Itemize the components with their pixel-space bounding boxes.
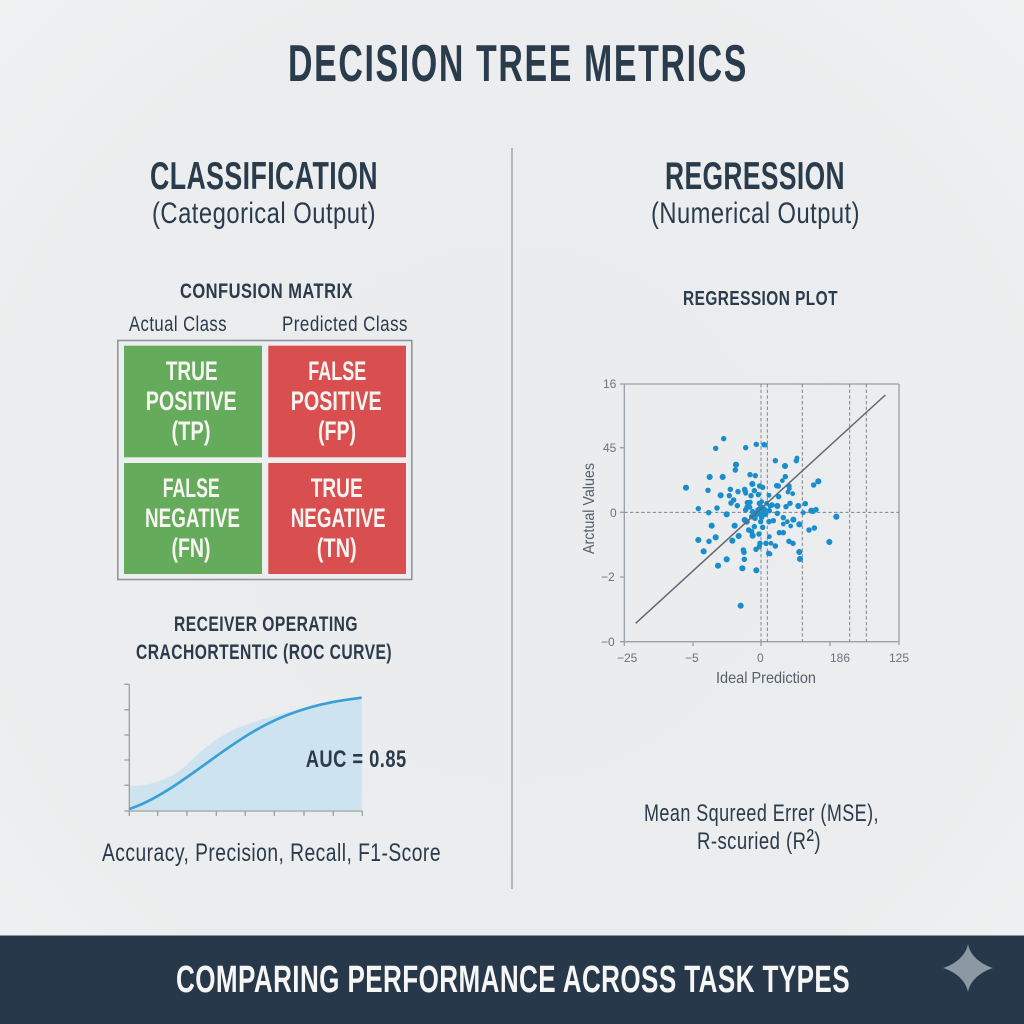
heading: classification <box>150 155 378 230</box>
axis tick labels <box>601 377 909 665</box>
x axis label: Ideal Prediction <box>716 670 816 687</box>
cell: true positive <box>124 346 262 457</box>
cell: true negative: (TN) <box>317 533 357 563</box>
scatter points <box>683 436 839 608</box>
panel: regression <box>581 155 909 856</box>
roc chart <box>124 684 362 816</box>
axis tick labels: 45 <box>603 441 617 455</box>
cell: true positive: POSITIVE <box>146 386 237 416</box>
confusion matrix <box>118 340 412 580</box>
cell: true positive: TRUE <box>166 356 218 386</box>
cell: true positive: (TP) <box>172 416 210 446</box>
cell: false positive: (FP) <box>318 416 356 446</box>
heading: regression <box>651 155 860 230</box>
heading: confusion matrix: CONFUSION MATRIX <box>180 280 353 303</box>
heading: classification: (Categorical Output) <box>152 197 376 230</box>
cell: false positive: FALSE <box>308 356 366 386</box>
heading: regression plot: REGRESSION PLOT <box>683 288 838 310</box>
axis tick labels: 16 <box>603 377 617 391</box>
axis tick labels: −25 <box>617 651 638 665</box>
heading: roc curve <box>136 613 392 664</box>
title: DECISION TREE METRICS <box>288 35 748 93</box>
axis tick labels: −0 <box>601 635 615 649</box>
footer banner <box>0 936 1024 1024</box>
regression metrics: R-scuried (R²) <box>697 824 821 856</box>
icon: sparkle <box>943 944 993 992</box>
cell: false negative: FALSE <box>163 473 220 503</box>
regression scatter plot <box>581 377 909 687</box>
heading: regression: REGRESSION <box>665 155 845 198</box>
regression metrics: Mean Squreed Errer (MSE), <box>644 800 879 827</box>
axis tick labels: −2 <box>601 570 615 584</box>
axis tick labels: 0 <box>610 506 617 520</box>
cell: false positive: POSITIVE <box>291 386 382 416</box>
cell: true negative: NEGATIVE <box>291 503 386 533</box>
cell: false positive <box>268 346 406 457</box>
label: auc value: AUC = 0.85 <box>306 746 407 773</box>
cell: false negative: NEGATIVE <box>145 503 240 533</box>
axis tick labels: −5 <box>685 651 699 665</box>
heading: roc curve: RECEIVER OPERATING <box>174 613 358 636</box>
axis tick labels: 186 <box>830 651 850 665</box>
heading: classification: CLASSIFICATION <box>150 155 378 198</box>
axis tick labels: 125 <box>889 651 909 665</box>
label: actual class: Actual Class <box>129 313 227 336</box>
heading: roc curve: CRACHORTENTIC (ROC CURVE) <box>136 641 392 664</box>
heading: regression: (Numerical Output) <box>651 197 860 230</box>
regression metrics <box>644 800 879 856</box>
classification metrics list: Accuracy, Precision, Recall, F1-Score <box>102 839 441 867</box>
cell: true negative <box>268 463 406 574</box>
cell: false negative <box>124 463 262 574</box>
label: predicted class: Predicted Class <box>282 313 408 336</box>
panel: classification <box>102 155 441 867</box>
axis tick labels: 0 <box>757 651 764 665</box>
y axis label: Arctual Values <box>581 463 598 554</box>
cell: true negative: TRUE <box>311 473 363 503</box>
cell: false negative: (FN) <box>172 533 210 563</box>
